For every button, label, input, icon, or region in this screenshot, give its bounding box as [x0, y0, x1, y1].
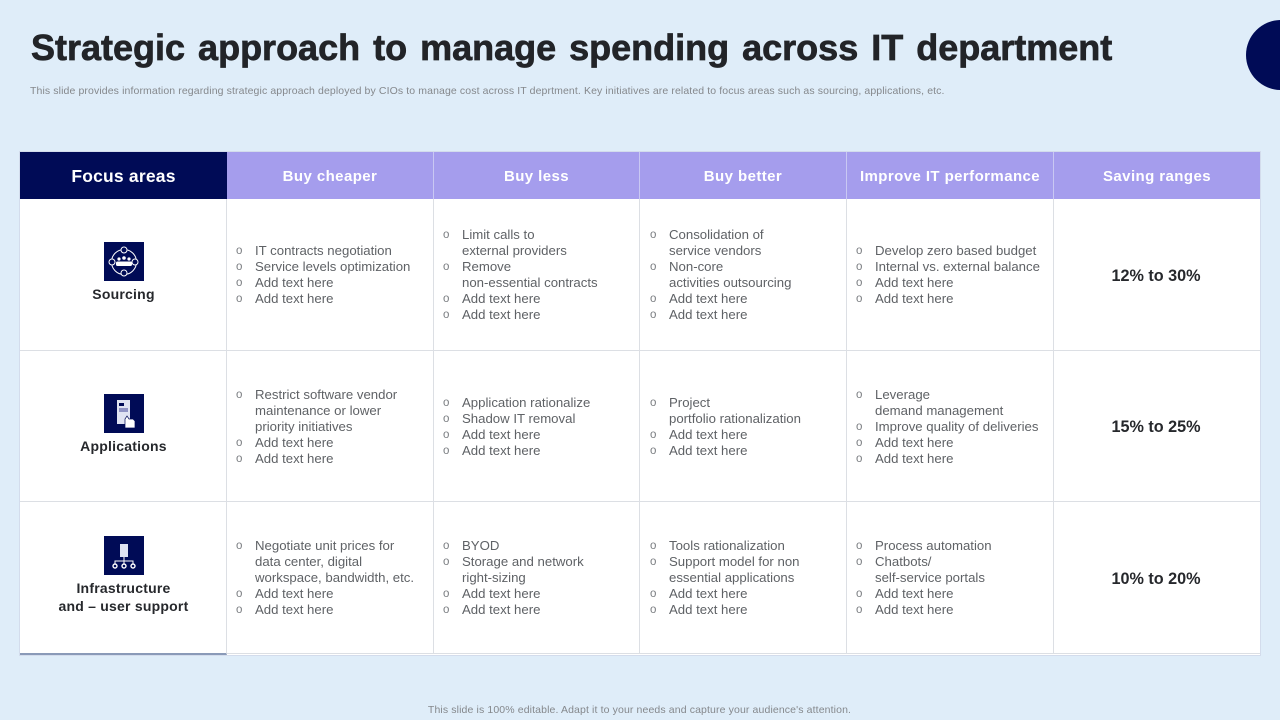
cell: infrastructure, buy cheaper: data center, digital — [255, 554, 362, 569]
header: Improve IT performance — [847, 152, 1054, 199]
cell: sourcing, buy cheaper: o — [236, 245, 242, 257]
cell: sourcing, improve IT performance: Add text here — [875, 275, 953, 290]
cell: applications, buy cheaper: Restrict software vendor — [255, 386, 397, 402]
header: Improve IT performance: Improve IT performance — [860, 168, 1040, 184]
cell: sourcing, buy better: Consolidation of — [669, 227, 764, 242]
cell: infrastructure, buy better: Add text here — [669, 602, 747, 617]
header: Buy cheaper: Buy cheaper — [283, 168, 377, 184]
cell: sourcing, buy cheaper: o — [236, 277, 242, 289]
cell: sourcing, improve IT performance: Internal vs. external balance — [875, 259, 1040, 274]
row label: Applications — [20, 351, 227, 502]
cell: sourcing, buy cheaper: Add text here — [255, 275, 333, 290]
cell: infrastructure saving range — [1054, 502, 1260, 654]
cell: applications, buy cheaper: maintenance or lower — [255, 402, 381, 418]
header: Buy less — [434, 152, 640, 199]
cell: infrastructure, buy cheaper: Add text here — [255, 586, 333, 601]
cell: applications saving range — [1054, 351, 1260, 502]
cell: sourcing, improve IT performance: o — [856, 245, 862, 257]
cell: applications, buy cheaper: priority initiatives — [255, 418, 352, 434]
cell: sourcing, buy less: o — [443, 261, 449, 273]
cell: infrastructure, improve IT performance: o — [856, 556, 862, 568]
cell: sourcing saving range: 12% to 30% — [1111, 266, 1201, 284]
cell: infrastructure, buy less: Add text here — [462, 602, 540, 617]
cell: sourcing, improve IT performance: o — [856, 293, 862, 305]
cell: sourcing, buy less: Add text here — [462, 291, 540, 306]
cell: sourcing, buy cheaper: Add text here — [255, 291, 333, 306]
row label: Infrastructure and end-user support: Infrastructure — [76, 580, 171, 596]
cell: applications, buy better: Add text here — [669, 426, 747, 442]
cell: applications, buy better: o — [650, 396, 656, 408]
cell: applications, improve IT performance: Add text here — [875, 434, 953, 450]
cell: infrastructure, buy cheaper: o — [236, 540, 242, 552]
cell: infrastructure, buy better: essential applications — [669, 570, 794, 585]
cell: infrastructure saving range: 10% to 20% — [1111, 570, 1201, 588]
cell: applications, buy less: o — [443, 396, 449, 408]
cell: sourcing, buy less: Remove — [462, 259, 511, 274]
cell: sourcing, buy better: o — [650, 293, 656, 305]
cell: infrastructure, improve IT performance: o — [856, 540, 862, 552]
cell: infrastructure, buy less: o — [443, 556, 449, 568]
cell: sourcing, buy less: Limit calls to — [462, 227, 535, 242]
cell: applications, buy cheaper: Add text here — [255, 434, 333, 450]
cell: applications, buy less: Add text here — [462, 426, 540, 442]
cell: infrastructure, buy less: o — [443, 604, 449, 616]
cell: applications, buy less: Application rationalize — [462, 394, 590, 410]
cell: applications, buy better: Project — [669, 394, 710, 410]
header: Buy better — [640, 152, 847, 199]
cell: sourcing, improve IT performance: o — [856, 261, 862, 273]
cell: infrastructure, buy better: Add text here — [669, 586, 747, 601]
header: Saving ranges — [1054, 152, 1260, 199]
cell: sourcing, buy cheaper: o — [236, 261, 242, 273]
subtitle description: This slide provides information regarding strategic approach deployed by CIOs to manage cost across IT deprtment. Key initiatives are related to focus areas such as sourcing, applications, etc. — [30, 85, 945, 97]
cell: sourcing, buy less — [434, 199, 640, 351]
cell: infrastructure, improve IT performance — [847, 502, 1054, 654]
cell: applications, buy less: o — [443, 428, 449, 440]
cell: applications, improve IT performance: Add text here — [875, 450, 953, 466]
cell: infrastructure, buy less: Add text here — [462, 586, 540, 601]
cell: infrastructure, buy cheaper — [227, 502, 434, 654]
cell: applications, improve IT performance: Leverage — [875, 386, 930, 402]
cell: applications, improve IT performance: o — [856, 452, 862, 464]
cell: sourcing, improve IT performance: o — [856, 277, 862, 289]
header: Focus areas — [20, 152, 227, 199]
cell: applications, improve IT performance: o — [856, 436, 862, 448]
cell: sourcing, buy better: o — [650, 309, 656, 321]
header: Buy cheaper — [227, 152, 434, 199]
cell: applications, improve IT performance: Improve quality of deliveries — [875, 418, 1038, 434]
cell: sourcing, buy better: Non-core — [669, 259, 723, 274]
cell: infrastructure, improve IT performance: o — [856, 604, 862, 616]
cell: applications, buy less: Shadow IT removal — [462, 410, 575, 426]
cell: sourcing, buy less: o — [443, 229, 449, 241]
cell: infrastructure, buy cheaper: Add text here — [255, 602, 333, 617]
icon: sourcing team circle — [104, 242, 144, 281]
cell: sourcing saving range — [1054, 199, 1260, 351]
cell: applications, buy cheaper: o — [236, 452, 242, 464]
cell: sourcing, buy less: Add text here — [462, 307, 540, 322]
cell: sourcing, buy better: activities outsourcing — [669, 275, 791, 290]
title: Strategic approach to manage spending across IT department — [31, 27, 1112, 68]
cell: sourcing, improve IT performance — [847, 199, 1054, 351]
cell: infrastructure, buy less: o — [443, 540, 449, 552]
row label: Infrastructure and end-user support: and – user support — [58, 598, 188, 614]
cell: sourcing, buy cheaper: o — [236, 293, 242, 305]
header: Focus areas: Focus areas — [71, 166, 176, 186]
cell: applications, buy less: o — [443, 444, 449, 456]
cell: infrastructure, buy less: Storage and network — [462, 554, 584, 569]
cell: infrastructure, buy cheaper: workspace, bandwidth, etc. — [255, 570, 414, 585]
header: Saving ranges: Saving ranges — [1103, 168, 1211, 184]
cell: infrastructure, buy less: o — [443, 588, 449, 600]
cell: infrastructure, buy less: BYOD — [462, 538, 499, 553]
cell: applications, buy less: Add text here — [462, 442, 540, 458]
cell: infrastructure, improve IT performance: Chatbots/ — [875, 554, 931, 569]
cell: infrastructure, improve IT performance: Add text here — [875, 602, 953, 617]
table: focus areas and savings — [20, 152, 1260, 655]
cell: applications, improve IT performance: o — [856, 420, 862, 432]
cell: applications, buy cheaper: o — [236, 436, 242, 448]
cell: infrastructure, buy better: o — [650, 604, 656, 616]
header: Buy better: Buy better — [704, 168, 782, 184]
cell: applications, improve IT performance: o — [856, 388, 862, 400]
cell: applications, buy better: Add text here — [669, 442, 747, 458]
cell: infrastructure, buy better: Support model for non — [669, 554, 800, 569]
cell: applications, buy cheaper — [227, 351, 434, 502]
cell: infrastructure, improve IT performance: self-service portals — [875, 570, 985, 585]
cell: infrastructure, improve IT performance: o — [856, 588, 862, 600]
cell: applications, buy less — [434, 351, 640, 502]
row label: Sourcing: Sourcing — [92, 286, 155, 302]
cell: applications, improve IT performance — [847, 351, 1054, 502]
cell: infrastructure, buy less — [434, 502, 640, 654]
header: Buy less: Buy less — [504, 168, 569, 184]
cell: sourcing, buy better: Add text here — [669, 291, 747, 306]
cell: sourcing, improve IT performance: Add text here — [875, 291, 953, 306]
cell: sourcing, buy less: o — [443, 309, 449, 321]
cell: sourcing, buy better: service vendors — [669, 243, 761, 258]
cell: applications, buy cheaper: o — [236, 388, 242, 400]
cell: applications, buy cheaper: Add text here — [255, 450, 333, 466]
cell: sourcing, buy cheaper — [227, 199, 434, 351]
cell: applications, buy better — [640, 351, 847, 502]
cell: infrastructure, buy cheaper: o — [236, 604, 242, 616]
row label: Infrastructure and end-user support — [20, 502, 227, 655]
cell: applications, buy better: o — [650, 444, 656, 456]
cell: infrastructure, improve IT performance: Process automation — [875, 538, 992, 553]
cell: infrastructure, buy cheaper: Negotiate unit prices for — [255, 538, 394, 553]
cell: applications saving range: 15% to 25% — [1111, 418, 1201, 436]
cell: sourcing, buy better: o — [650, 261, 656, 273]
cell: sourcing, buy less: non-essential contracts — [462, 275, 598, 290]
icon: building network — [104, 536, 144, 575]
cell: sourcing, buy less: o — [443, 293, 449, 305]
cell: infrastructure, improve IT performance: Add text here — [875, 586, 953, 601]
cell: infrastructure, buy cheaper: o — [236, 588, 242, 600]
cell: infrastructure, buy better: o — [650, 588, 656, 600]
cell: infrastructure, buy better: o — [650, 540, 656, 552]
cell: infrastructure, buy better — [640, 502, 847, 654]
footer note: This slide is 100% editable. Adapt it to your needs and capture your audience's attention. — [428, 704, 851, 716]
row label: Sourcing — [20, 199, 227, 351]
cell: infrastructure, buy better: Tools rationalization — [669, 538, 785, 553]
cell: applications, buy better: o — [650, 428, 656, 440]
cell: sourcing, buy less: external providers — [462, 243, 567, 258]
decorative navy circle — [1246, 20, 1280, 90]
cell: sourcing, buy better: Add text here — [669, 307, 747, 322]
icon: application touch screen — [104, 394, 144, 433]
cell: infrastructure, buy better: o — [650, 556, 656, 568]
cell: applications, buy less: o — [443, 412, 449, 424]
cell: sourcing, buy better: o — [650, 229, 656, 241]
cell: sourcing, buy cheaper: IT contracts negotiation — [255, 243, 392, 258]
cell: sourcing, improve IT performance: Develop zero based budget — [875, 243, 1036, 258]
cell: infrastructure, buy less: right-sizing — [462, 570, 526, 585]
cell: sourcing, buy better — [640, 199, 847, 351]
cell: applications, buy better: portfolio rationalization — [669, 410, 801, 426]
row label: Applications: Applications — [80, 438, 167, 454]
cell: sourcing, buy cheaper: Service levels optimization — [255, 259, 410, 274]
cell: applications, improve IT performance: demand management — [875, 402, 1003, 418]
